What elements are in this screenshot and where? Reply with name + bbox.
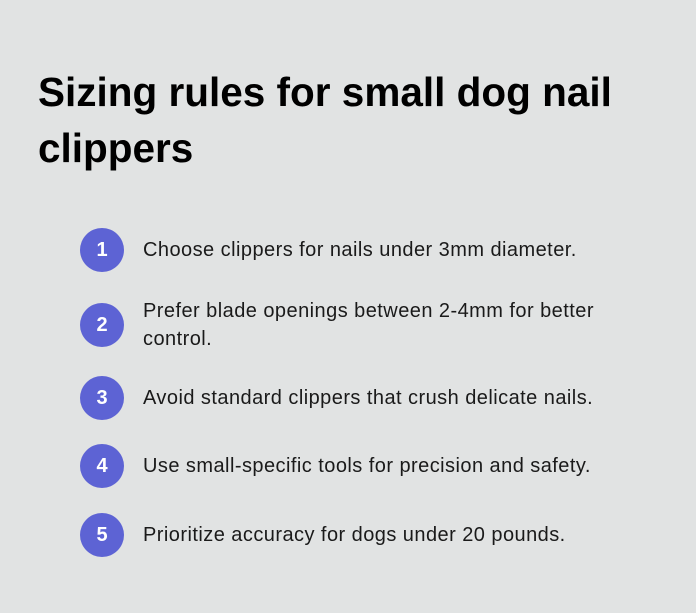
item 1: Choose clippers for nails under 3mm diameter. — [143, 239, 577, 261]
item 3: 3 — [96, 387, 108, 409]
item 3 — [80, 376, 593, 420]
item 5: Prioritize accuracy for dogs under 20 pounds. — [143, 524, 566, 546]
title — [38, 69, 612, 171]
item 2: Prefer blade openings between 2-4mm for better — [143, 300, 594, 322]
title: Sizing rules for small dog nail — [38, 69, 612, 115]
title: clippers — [38, 125, 193, 171]
item 2: control. — [143, 328, 212, 350]
item 4: Use small-specific tools for precision and safety. — [143, 455, 591, 477]
item 2: 2 — [96, 314, 108, 336]
item 5 — [80, 513, 566, 557]
item 1 — [80, 228, 577, 272]
item 3: Avoid standard clippers that crush delicate nails. — [143, 387, 593, 409]
item 5: 5 — [96, 524, 108, 546]
item 1: 1 — [96, 239, 108, 261]
item 2 — [80, 300, 594, 350]
item 4 — [80, 444, 591, 488]
item 4: 4 — [96, 455, 108, 477]
